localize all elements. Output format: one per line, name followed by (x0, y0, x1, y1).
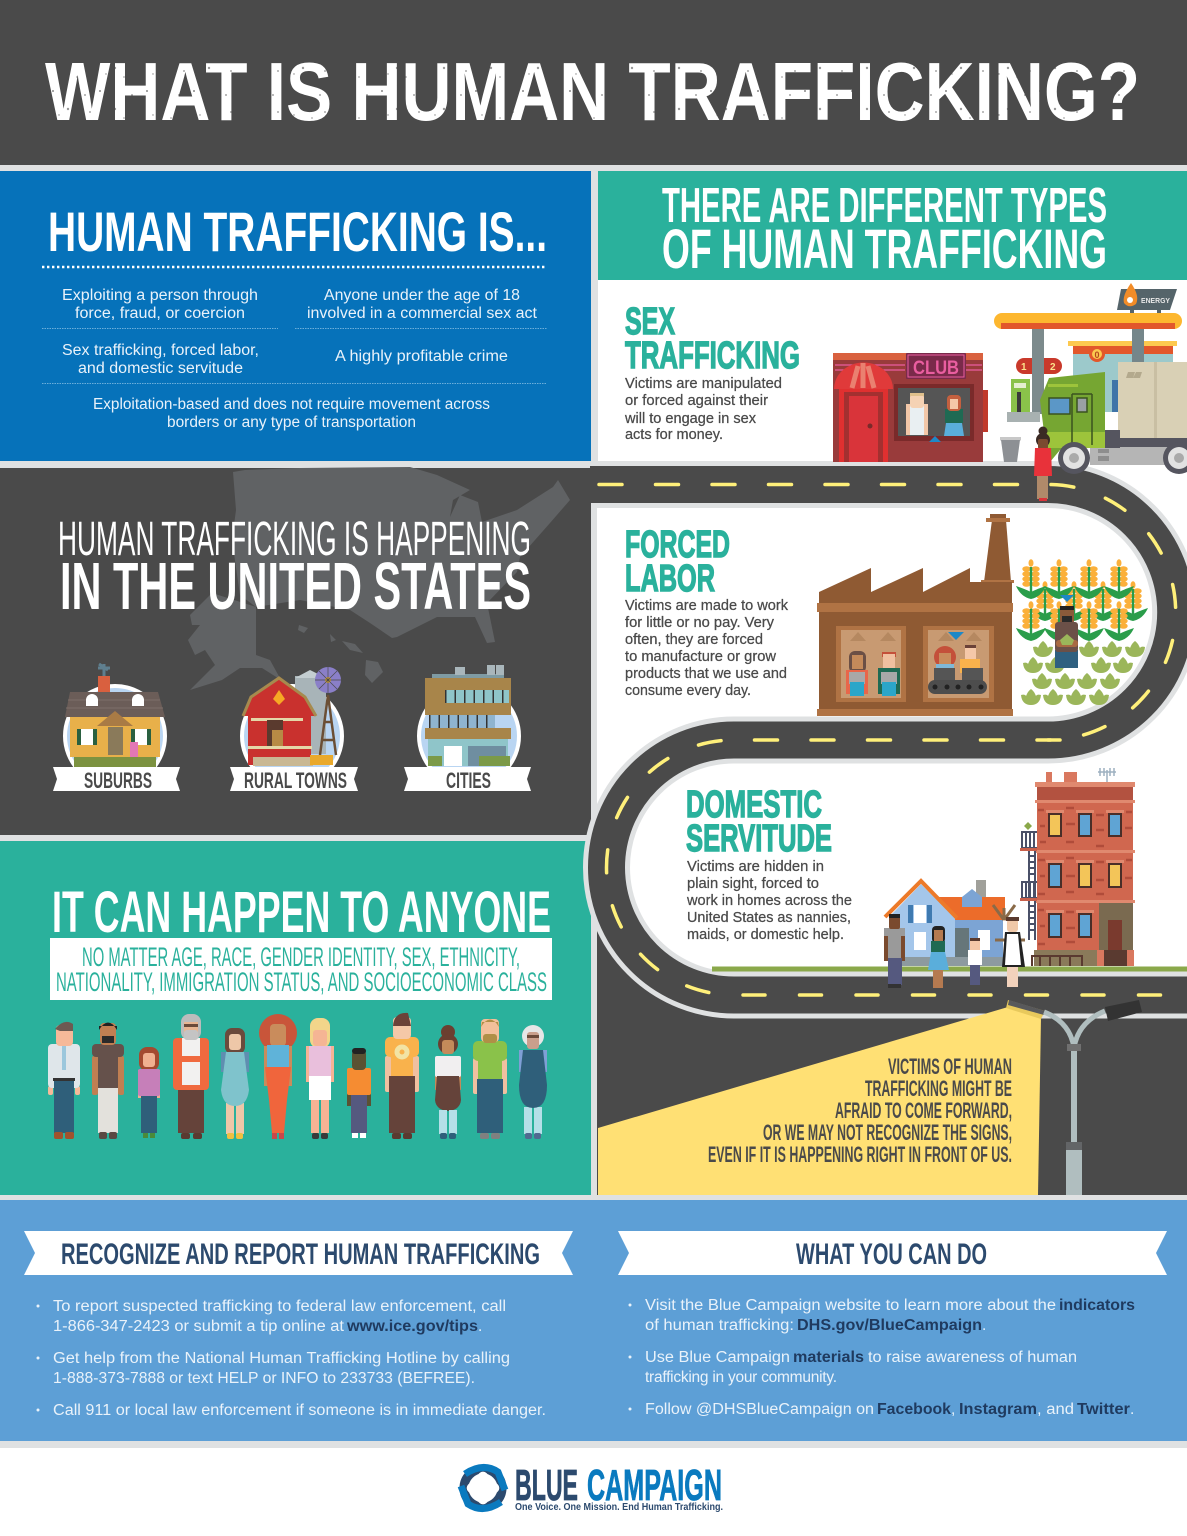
person 11 (473, 1019, 507, 1139)
heading: forced labor: FORCED (625, 524, 730, 566)
person 7 (306, 1018, 334, 1139)
text: what you can do bullets: Instagram (959, 1401, 1037, 1418)
illustration: gas station: 2 (1050, 362, 1056, 373)
text: sex trafficking description (624, 376, 782, 443)
illustration: gas station (994, 283, 1182, 422)
person 2 (92, 1022, 124, 1139)
panel: forced labor (625, 514, 1148, 716)
subheading box: NATIONALITY, IMMIGRATION STATUS, AND SOCIOECONOMIC CLASS (56, 967, 547, 997)
banner: recognize and report (24, 1231, 573, 1275)
icon: trash can (1000, 437, 1021, 462)
maid (1002, 917, 1025, 987)
heading: forced labor: LABOR (625, 558, 715, 600)
person 5 (221, 1028, 249, 1139)
text: forced labor description: often, they are forced (625, 632, 763, 648)
person 10 (435, 1025, 461, 1139)
text: sex trafficking description: acts for money. (625, 427, 723, 443)
people row (48, 1013, 547, 1139)
text: forced labor description: products that we use and (625, 666, 787, 682)
callout: victims might be afraid: VICTIMS OF HUMAN (888, 1054, 1012, 1079)
text: domestic servitude description (686, 859, 852, 943)
text: what you can do bullets: Use Blue Campaign (645, 1349, 790, 1366)
definition text block: Sex trafficking, forced labor, (62, 342, 259, 359)
banner: what you can do (618, 1231, 1167, 1275)
heading: domestic servitude: SERVITUDE (686, 818, 832, 860)
text: sex trafficking description: will to engage in sex (624, 411, 757, 427)
person 3 (138, 1047, 160, 1138)
text: domestic servitude description: maids, or domestic help. (687, 927, 844, 943)
text: what you can do bullets: . (1130, 1401, 1134, 1418)
text: recognize and report bullets: Call 911 or local law enforcement if someone is in immediate danger. (53, 1402, 546, 1419)
text: recognize and report bullets: www.ice.gov/tips (346, 1318, 478, 1335)
definition text block: Exploiting a person through (62, 287, 258, 304)
text: forced labor description: Victims are made to work (625, 598, 789, 614)
text: domestic servitude description: Victims are hidden in (687, 859, 824, 875)
text: what you can do bullets: Facebook (877, 1401, 951, 1418)
heading: in the united states: IN THE UNITED STATES (60, 549, 531, 624)
person 1 (48, 1022, 80, 1139)
definition text block: Exploitation-based and does not require movement across (93, 396, 490, 413)
illustration: brick apartment building (1020, 768, 1135, 966)
panel: recognize and report / what you can do (0, 1200, 1187, 1441)
illustration: gas station: 1 (1021, 362, 1027, 373)
text: what you can do bullets (628, 1297, 1135, 1418)
man (884, 914, 905, 988)
heading: sex trafficking: TRAFFICKING (625, 335, 800, 377)
illustration: club: CLUB (913, 358, 959, 379)
text: what you can do bullets: , and (1037, 1401, 1074, 1418)
boy (968, 938, 982, 985)
person 12 (519, 1025, 547, 1139)
road (590, 484, 1187, 995)
streetlight with light beam (598, 1000, 1142, 1195)
icon: suburbs (53, 664, 180, 793)
text: recognize and report bullets: Get help from the National Human Trafficking Hotline by calling (53, 1350, 510, 1367)
illustration: club (833, 353, 988, 462)
text: what you can do bullets: Follow @DHSBlueCampaign on (645, 1401, 874, 1418)
header band (0, 0, 1187, 165)
logo: blue campaign: CAMPAIGN (587, 1461, 722, 1510)
subheading box (50, 938, 552, 1000)
figures: family and maid (884, 914, 1025, 988)
definition text block: Anyone under the age of 18 (324, 287, 520, 304)
text: forced labor description (625, 598, 789, 699)
logo: blue campaign: One Voice. One Mission. End Human Trafficking. (515, 1502, 723, 1513)
footer band (0, 1448, 1187, 1536)
heading: anyone: IT CAN HAPPEN TO ANYONE (52, 880, 551, 945)
person 9 (385, 1013, 419, 1139)
illustration: truck (1040, 362, 1187, 474)
heading: human trafficking is: HUMAN TRAFFICKING IS... (48, 200, 547, 263)
definition text block (62, 287, 538, 431)
text: domestic servitude description: plain sight, forced to (687, 876, 819, 892)
text: domestic servitude description: United States as nannies, (687, 910, 851, 926)
panel: human trafficking is (0, 171, 591, 461)
woman (928, 926, 949, 988)
definition text block: borders or any type of transportation (167, 414, 416, 431)
icon: cities (404, 665, 531, 793)
text: what you can do bullets: materials (793, 1349, 864, 1366)
text: recognize and report bullets: To report suspected trafficking to federal law enforcement, call (53, 1298, 506, 1315)
heading: domestic servitude: DOMESTIC (686, 784, 822, 826)
text: what you can do bullets: Visit the Blue Campaign website to learn more about the (645, 1297, 1056, 1314)
illustration: gas station: ENERGY (1141, 298, 1170, 305)
logo: blue campaign: BLUE (515, 1461, 578, 1510)
panel: happening in the united states (0, 467, 591, 835)
definition text block: force, fraud, or coercion (75, 305, 245, 322)
illustration: gas station: 0 (1094, 350, 1100, 360)
white backgrounds for road panels (597, 508, 1187, 1195)
text: recognize and report bullets: . (478, 1318, 482, 1335)
definition text block: A highly profitable crime (335, 348, 508, 365)
text: forced labor description: for little or no pay. Very (625, 615, 775, 631)
icon: suburbs: SUBURBS (84, 768, 152, 793)
text: what you can do bullets: to raise awareness of human (868, 1349, 1077, 1366)
illustration: factory (817, 514, 1014, 716)
callout: victims might be afraid: AFRAID TO COME FORWARD, (835, 1098, 1012, 1123)
illustration: blue house (885, 880, 1025, 966)
text: what you can do bullets: , (951, 1401, 955, 1418)
definition text block: and domestic servitude (78, 360, 243, 377)
figure: woman in red dress (1034, 426, 1052, 501)
person 4 (173, 1014, 209, 1139)
text: forced labor description: to manufacture or grow (625, 649, 777, 665)
icon: rural towns (230, 667, 358, 793)
panel: types heading (598, 171, 1187, 280)
text: what you can do bullets: of human trafficking: (645, 1317, 794, 1334)
text: what you can do bullets: . (982, 1317, 986, 1334)
heading: sex trafficking (625, 301, 800, 377)
panel: domestic servitude (686, 768, 1135, 988)
text: domestic servitude description: work in homes across the (686, 893, 852, 909)
text: recognize and report bullets (36, 1298, 546, 1419)
panel: it can happen to anyone (0, 841, 591, 1195)
text: recognize and report bullets: 1-888-373-7888 or text HELP or INFO to 233733 (BEFREE). (53, 1370, 475, 1387)
icon: cities: CITIES (446, 768, 491, 793)
text: sex trafficking description: or forced against their (625, 393, 768, 409)
heading: domestic servitude (686, 784, 832, 860)
heading: sex trafficking: SEX (625, 301, 675, 343)
banner: what you can do: WHAT YOU CAN DO (796, 1238, 987, 1271)
panel: sex trafficking (624, 283, 1187, 501)
map of the United States (188, 467, 570, 690)
text: sex trafficking description: Victims are manipulated (625, 376, 782, 392)
text: recognize and report bullets: 1-866-347-2423 or submit a tip online at (53, 1318, 345, 1335)
person 8 (347, 1048, 371, 1138)
text: what you can do bullets: trafficking in your community. (645, 1369, 837, 1386)
icon: rural towns: RURAL TOWNS (244, 768, 347, 793)
text: what you can do bullets: Twitter (1077, 1401, 1130, 1418)
logo mark (461, 1467, 505, 1509)
logo: blue campaign (461, 1461, 723, 1513)
definition text block: involved in a commercial sex act (307, 305, 538, 322)
illustration: crop field with farmer (1016, 559, 1148, 705)
person 6 (259, 1014, 297, 1139)
heading: forced labor (625, 524, 730, 600)
subheading box: NO MATTER AGE, RACE, GENDER IDENTITY, SEX, ETHNICITY, (82, 942, 520, 972)
callout: victims might be afraid (708, 1054, 1012, 1167)
banner: recognize and report: RECOGNIZE AND REPORT HUMAN TRAFFICKING (61, 1238, 540, 1271)
callout: victims might be afraid: TRAFFICKING MIGHT BE (865, 1076, 1012, 1101)
heading: happening: HUMAN TRAFFICKING IS HAPPENING (58, 513, 531, 566)
text: what you can do bullets: indicators (1059, 1297, 1135, 1314)
text: forced labor description: consume every day. (625, 683, 751, 699)
text: what you can do bullets: DHS.gov/BlueCampaign (797, 1317, 982, 1334)
